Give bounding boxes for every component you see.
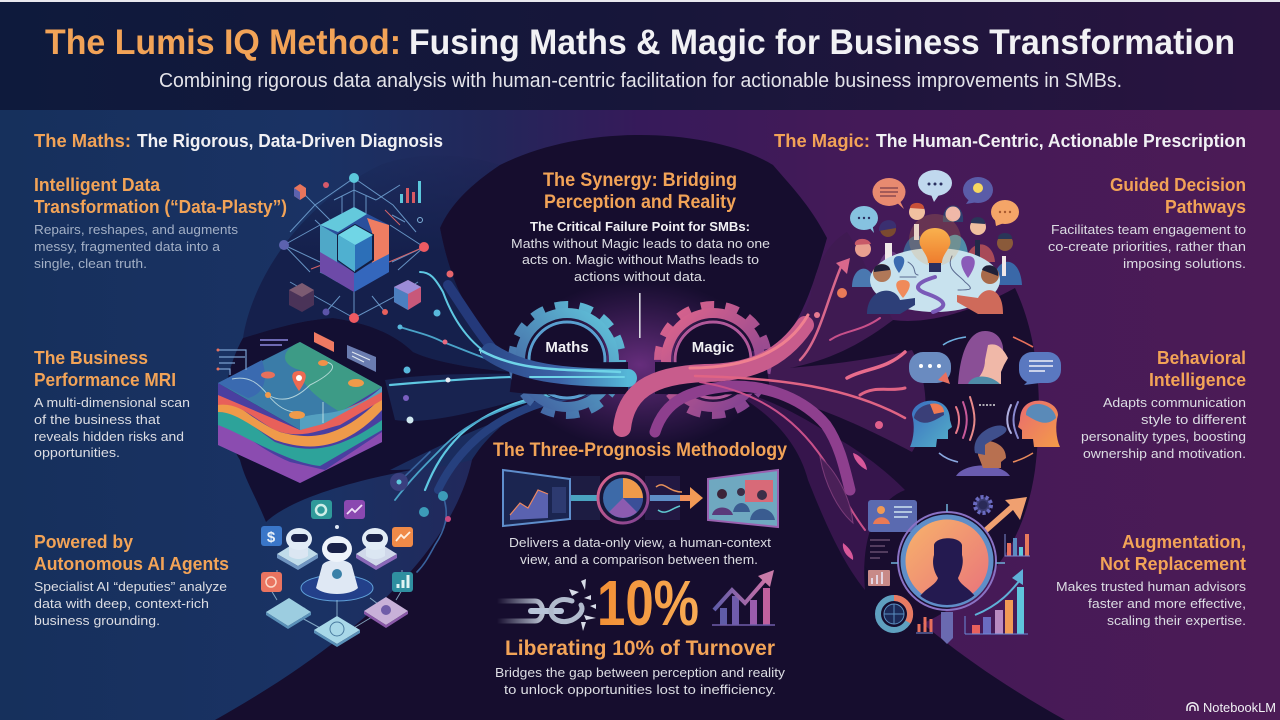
brain head right [1018,401,1060,447]
callout: liberating turnover [495,637,786,697]
magic section heading: The Magic: [774,131,870,151]
block: data transformation: single, clean truth. [34,256,147,271]
block: AI agents: data with deep, context-rich [34,596,209,611]
text: three prognosis: view, and a comparison between them. [520,552,758,567]
text: three prognosis: Delivers a data-only view, a human-context [509,535,771,550]
block: data transformation: Intelligent Data [34,175,161,195]
callout: liberating turnover: Bridges the gap between perception and reality [495,665,786,680]
platforms [266,541,408,647]
block: augmentation: Not Replacement [1100,554,1246,574]
block: performance MRI: opportunities. [34,445,120,460]
callout: liberating turnover: to unlock opportunities lost to inefficiency. [504,682,776,697]
subtitle: Combining rigorous data analysis with human-centric facilitation for actionable business improvements in SMBs. [159,70,1122,92]
center heading: synergy: The Critical Failure Point for SMBs: [530,220,750,234]
gear label: magic: Magic [692,339,734,356]
block: AI agents [34,532,229,628]
sound waves [956,397,1018,440]
header band [0,0,1280,110]
block: AI agents: business grounding. [34,613,160,628]
center heading: synergy: Perception and Reality [544,192,736,213]
maths section heading: The Maths: [34,131,131,151]
icon: three prognosis graphic [503,470,778,527]
block: AI agents: Powered by [34,532,133,552]
block: AI agents: Specialist AI “deputies” analyze [34,579,227,594]
block: guided decision: Pathways [1165,197,1246,217]
man head [956,466,1010,476]
center heading: synergy: actions without data. [574,269,706,284]
standing people [852,203,1022,287]
block: augmentation [1056,532,1247,628]
center heading: synergy [511,170,770,284]
block: augmentation: faster and more effective, [1088,596,1246,611]
block: performance MRI: of the business that [34,412,160,427]
icon: team around table [850,170,1022,314]
nodes [390,270,486,522]
title: The Lumis IQ Method: [45,23,401,62]
block: guided decision [1048,175,1246,271]
icon: data cube network [279,173,429,323]
block: guided decision: Facilitates team engagement to [1051,222,1246,237]
block: behavioral intelligence: Behavioral [1157,348,1246,368]
block: behavioral intelligence: style to different [1141,412,1246,427]
block: performance MRI: The Business [34,348,148,368]
block: performance MRI: reveals hidden risks and [34,429,184,444]
big 10 percent: 10% [597,567,699,639]
speech bubbles [850,170,1019,233]
magic section heading: The Human-Centric, Actionable Prescription [876,131,1246,151]
icon: broken chain [497,579,596,631]
title: Fusing Maths & Magic for Business Transformation [409,23,1235,62]
central convergence [480,262,905,530]
front people [867,264,1003,314]
block: behavioral intelligence: personality types, boosting [1081,429,1246,444]
flow decorations: magic [814,258,883,560]
block: augmentation: Augmentation, [1122,532,1246,552]
block: behavioral intelligence: ownership and motivation. [1083,446,1246,461]
text: three prognosis [509,535,771,567]
robots [286,525,388,594]
bubble left [909,352,951,383]
block: data transformation: Transformation (“Data-Plasty”) [34,197,287,217]
gear: magic [660,306,766,414]
robot tiles [261,500,413,592]
icon: rising chart [712,570,775,625]
block: performance MRI: A multi-dimensional scan [34,395,190,410]
woman head [958,331,1003,384]
table [870,248,1000,312]
maths section heading: The Rigorous, Data-Driven Diagnosis [137,131,443,151]
lightbulb [909,214,961,272]
block: behavioral intelligence [1081,348,1246,461]
center heading: synergy: The Synergy: Bridging [543,170,737,191]
robot tiles: $ [267,529,276,546]
block: behavioral intelligence: Adapts communication [1103,395,1246,410]
callout: liberating turnover: Liberating 10% of Turnover [505,637,775,660]
title [45,23,1235,62]
block: data transformation [34,175,287,271]
block: augmentation: Makes trusted human advisors [1056,579,1247,594]
block: guided decision: imposing solutions. [1123,256,1246,271]
block: behavioral intelligence: Intelligence [1149,370,1246,390]
icon: AI agents [261,500,413,647]
brain head left [910,401,952,447]
block: performance MRI: Performance MRI [34,370,176,390]
block: augmentation: scaling their expertise. [1107,613,1246,628]
gear label: maths: Maths [545,339,589,356]
center heading: synergy: acts on. Magic without Maths leads to [522,252,759,267]
icon: behavioral intelligence people [909,331,1061,476]
block: performance MRI [34,348,190,460]
block: guided decision: Guided Decision [1110,175,1246,195]
bubble right [1019,352,1061,383]
icon: layered business map [216,332,382,483]
table paths and pins [894,256,975,312]
flow streams: maths [390,270,632,572]
gear: maths [514,306,620,414]
logo: NotebookLM: NotebookLM [1203,700,1276,715]
block: data transformation: Repairs, reshapes, and augments [34,222,239,237]
block: guided decision: co-create priorities, rather than [1048,239,1246,254]
icon: magnifier advisor [868,497,1030,644]
center heading: synergy: Maths without Magic leads to data no one [511,236,770,251]
center heading: three-prognosis: The Three-Prognosis Methodology [493,440,787,461]
block: data transformation: messy, fragmented data into a [34,239,221,254]
block: AI agents: Autonomous AI Agents [34,554,229,574]
